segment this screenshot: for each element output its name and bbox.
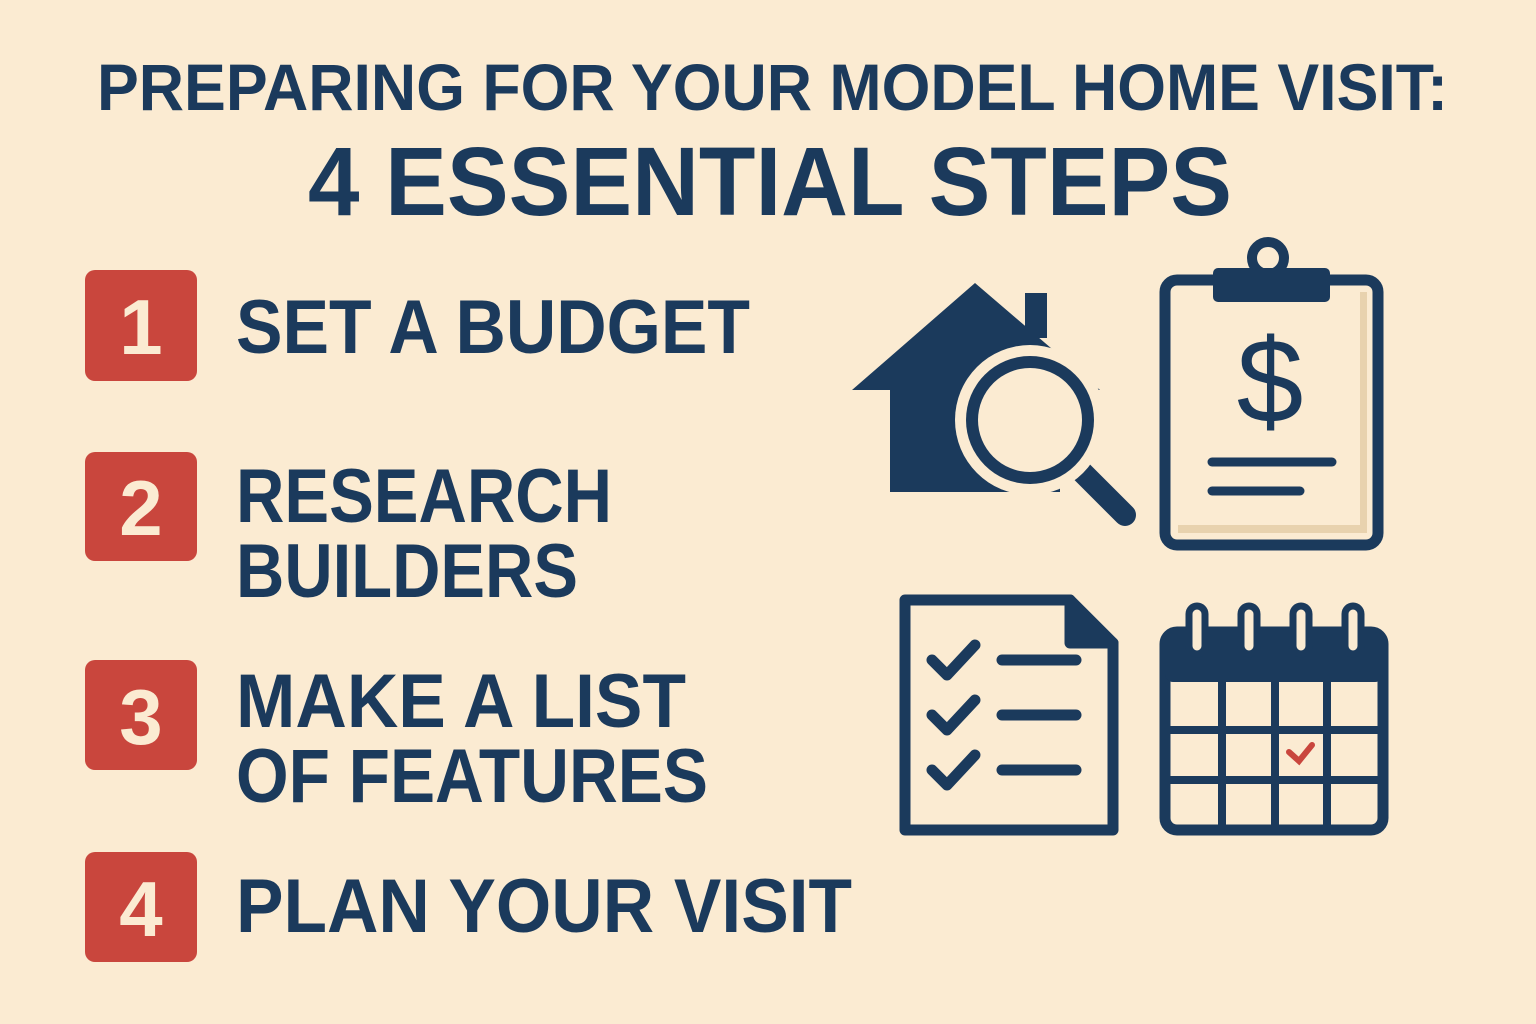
step 3: OF FEATURES — [236, 734, 708, 819]
icon: checklist document — [905, 600, 1113, 830]
step 3: MAKE A LIST — [236, 659, 686, 744]
step 3 — [85, 659, 708, 819]
step 1 — [85, 270, 750, 381]
step 3: 3 — [119, 673, 163, 761]
step 4: PLAN YOUR VISIT — [236, 864, 852, 949]
icon: clipboard with dollar: $ — [1237, 314, 1303, 448]
step 1: SET A BUDGET — [236, 285, 750, 370]
icon: clipboard with dollar — [1165, 242, 1378, 545]
step 1: 1 — [119, 283, 163, 371]
title: PREPARING FOR YOUR MODEL HOME VISIT: — [97, 50, 1448, 124]
title — [97, 50, 1448, 236]
step 2: BUILDERS — [236, 529, 578, 614]
title: 4 ESSENTIAL STEPS — [308, 127, 1232, 236]
step 2: RESEARCH — [236, 454, 612, 539]
icon: house with magnifier — [852, 283, 1125, 515]
icon: calendar — [1165, 606, 1383, 830]
step 2: 2 — [119, 464, 163, 552]
step 4 — [85, 852, 852, 962]
step 2 — [85, 452, 612, 614]
step 4: 4 — [119, 865, 163, 953]
